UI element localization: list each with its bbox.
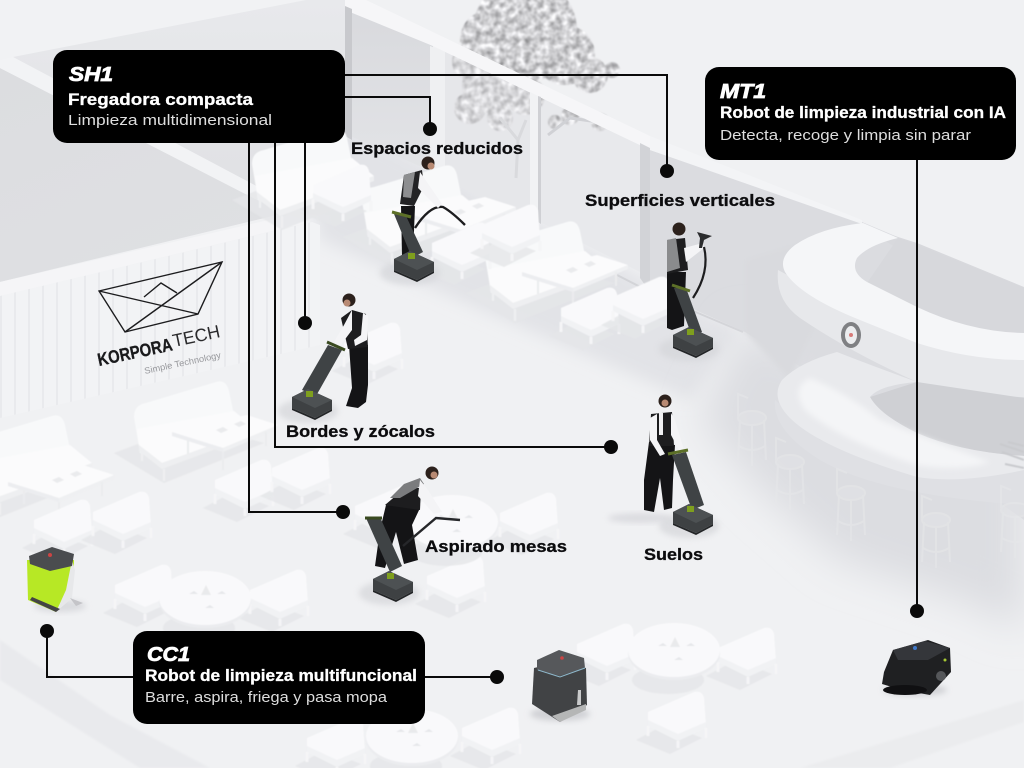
person: suelos xyxy=(608,394,719,538)
CC1 subtitle: Barre, aspira, friega y pasa mopa xyxy=(145,689,388,706)
callout: MT1 xyxy=(705,67,1016,160)
callout: SH1 xyxy=(53,50,345,143)
SH1 subtitle: Limpieza multidimensional xyxy=(68,112,272,129)
connector lines and dots: CC1 xyxy=(40,624,504,684)
bar stools xyxy=(738,394,1024,568)
robot: CC1 grey xyxy=(530,650,590,722)
logo tagline: Simple Technology xyxy=(143,350,222,376)
striped wall with logo xyxy=(0,222,320,418)
furniture xyxy=(0,128,776,768)
robot: CC1 lime green xyxy=(27,547,86,612)
person: aspirado mesas xyxy=(359,466,460,605)
wall frame band and mullions xyxy=(345,0,862,292)
floor shadow behind wall xyxy=(300,120,740,400)
bar counter shadow on floor xyxy=(700,325,1024,630)
label: Suelos: Suelos xyxy=(644,546,703,564)
SH1 model name: SH1 xyxy=(69,64,113,86)
label: Bordes y zocalos: Bordes y zócalos xyxy=(286,423,435,441)
upper left room roof xyxy=(0,0,345,296)
person: superficies verticales xyxy=(659,222,719,361)
CC1 title: Robot de limpieza multifuncional xyxy=(145,667,417,685)
label: Aspirado mesas: Aspirado mesas xyxy=(425,538,567,556)
plant xyxy=(1000,442,1024,468)
MT1 model name: MT1 xyxy=(720,81,766,103)
MT1 title: Robot de limpieza industrial con IA xyxy=(720,104,1006,122)
label: Superficies verticales: Superficies verticales xyxy=(585,192,775,210)
tree xyxy=(445,0,620,220)
connector line and dot: MT1 xyxy=(910,158,924,618)
callout: CC1 xyxy=(133,631,425,724)
curved bar lower xyxy=(775,352,1024,505)
robot: MT1 black xyxy=(882,640,951,696)
round emblem xyxy=(841,322,861,348)
icon: paper boat xyxy=(99,262,222,332)
CC1 model name: CC1 xyxy=(147,644,190,666)
logo wordmark: KORPORA xyxy=(96,335,174,370)
person: espacios reducidos xyxy=(380,156,465,285)
SH1 title: Fregadora compacta xyxy=(68,91,254,109)
lower floor edge xyxy=(0,640,210,768)
label: Espacios reducidos: Espacios reducidos xyxy=(351,140,523,158)
wall floor line xyxy=(617,275,743,332)
connector lines and dots: SH1 xyxy=(249,75,674,519)
back wall with glass xyxy=(348,8,1024,520)
MT1 subtitle: Detecta, recoge y limpia sin parar xyxy=(720,127,971,144)
person: bordes y zocalos xyxy=(278,294,368,423)
logo xyxy=(96,262,222,376)
curved bar upper xyxy=(778,223,1024,397)
logo wordmark suffix: TECH xyxy=(171,321,222,351)
